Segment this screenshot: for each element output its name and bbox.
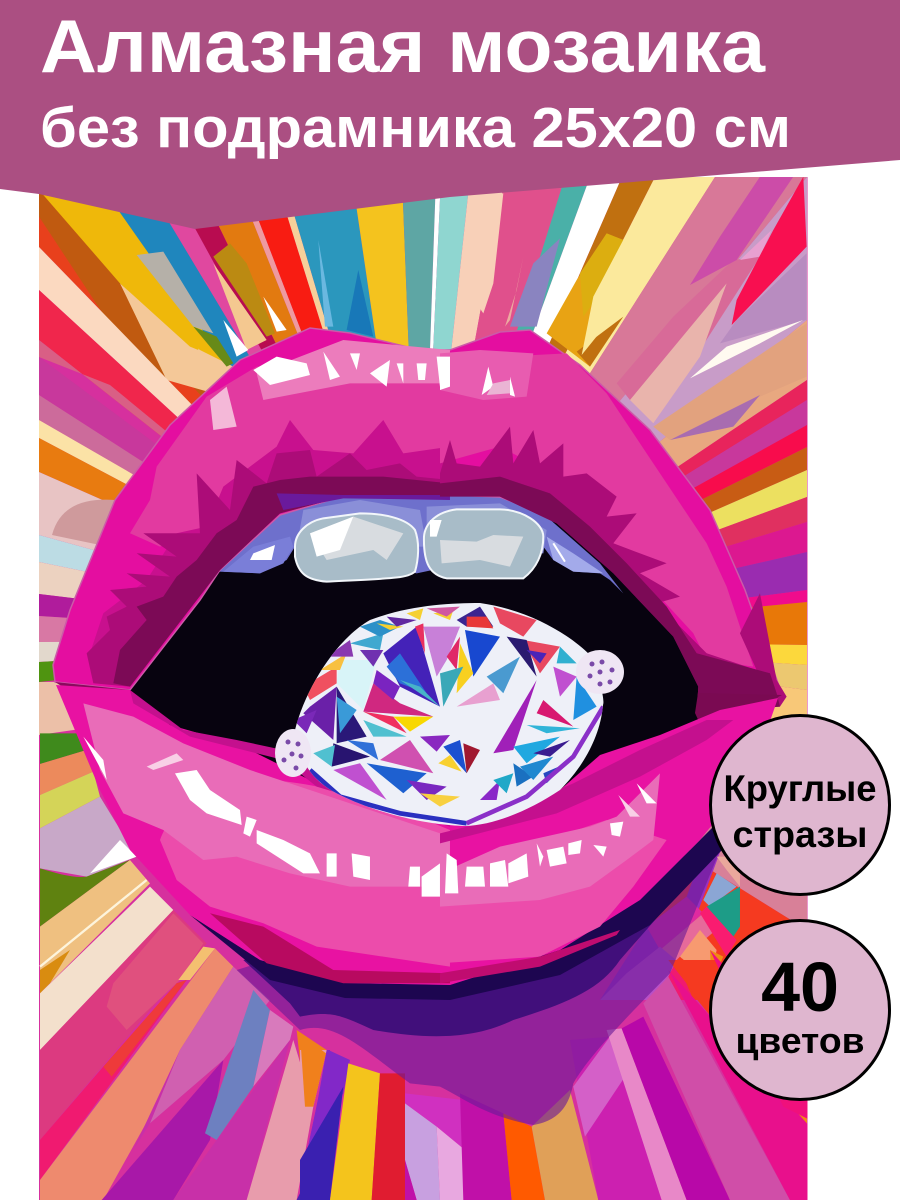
rays: right edge [620, 177, 807, 1124]
badge: 40 colours: цветов [736, 1020, 864, 1061]
lips with teeth and diamond [53, 328, 787, 985]
mouth interior [125, 485, 705, 835]
subtitle: без подрамника 25х20 см [40, 96, 791, 160]
tooth: right [424, 509, 543, 578]
title: Алмазная мозаика [40, 4, 766, 88]
badge: 40 colours [710, 920, 890, 1100]
mouth corner shadow [695, 693, 782, 735]
rays: lower right tiles [600, 852, 740, 1000]
upper lip: right half shading [440, 350, 787, 713]
tooth: left [295, 513, 418, 582]
artwork: radiating colour rays [39, 177, 810, 1200]
rays: top edge [39, 177, 807, 404]
rays: left edge [39, 247, 192, 735]
lower lip [56, 685, 778, 985]
badge: round rhinestones: Круглые [724, 768, 876, 809]
rays: upper right overlays [467, 177, 807, 440]
teeth [218, 487, 623, 593]
diamond [285, 600, 610, 830]
lower lip: left half shading [83, 690, 450, 983]
rays: lower left [40, 733, 330, 1200]
header banner [0, 0, 900, 229]
lower lip: right half shading [440, 720, 733, 983]
dark edge under lip [190, 825, 722, 1000]
badge: round rhinestones [710, 716, 890, 894]
rays: bottom with lip shadow [237, 850, 810, 1200]
badge: 40 colours: 40 [761, 948, 839, 1026]
rays: upper left overlays [39, 195, 373, 393]
upper lip: left half shading [87, 340, 450, 687]
badge: round rhinestones: стразы [732, 814, 868, 855]
upper lip [53, 328, 787, 713]
diamond side gems [275, 650, 624, 777]
